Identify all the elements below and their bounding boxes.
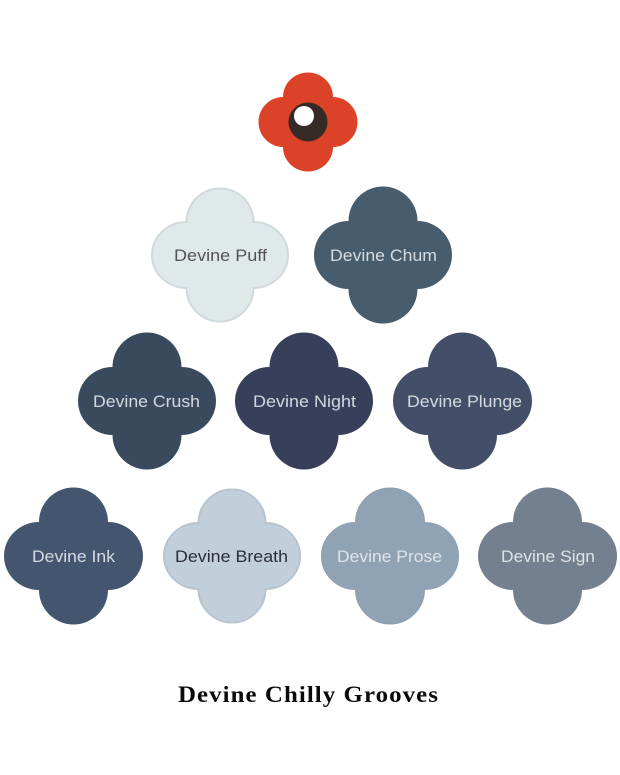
swatch: Devine Crush	[78, 333, 216, 469]
swatch: Devine Plunge	[393, 332, 532, 470]
swatch: Devine Prose	[322, 488, 458, 624]
swatch: Devine Crush: Devine Crush	[93, 393, 200, 411]
title: Devine Chilly Grooves	[178, 682, 439, 708]
icon: red poppy flower	[259, 72, 357, 172]
swatch: Devine Ink: Devine Ink	[32, 548, 116, 566]
swatch: Devine Prose: Devine Prose	[337, 548, 442, 566]
swatch: Devine Chum: Devine Chum	[330, 247, 437, 265]
swatch: Devine Breath	[164, 490, 300, 622]
swatch: Devine Night	[235, 333, 373, 469]
swatch: Devine Sign	[478, 488, 617, 624]
swatch: Devine Puff	[152, 188, 288, 321]
swatch: Devine Breath: Devine Breath	[175, 548, 288, 566]
swatch: Devine Chum	[314, 186, 452, 324]
swatch: Devine Ink	[4, 488, 143, 624]
swatch: Devine Sign: Devine Sign	[501, 548, 595, 566]
swatch: Devine Night: Devine Night	[253, 393, 356, 411]
swatch: Devine Plunge: Devine Plunge	[407, 393, 522, 411]
swatch: Devine Puff: Devine Puff	[174, 247, 267, 265]
